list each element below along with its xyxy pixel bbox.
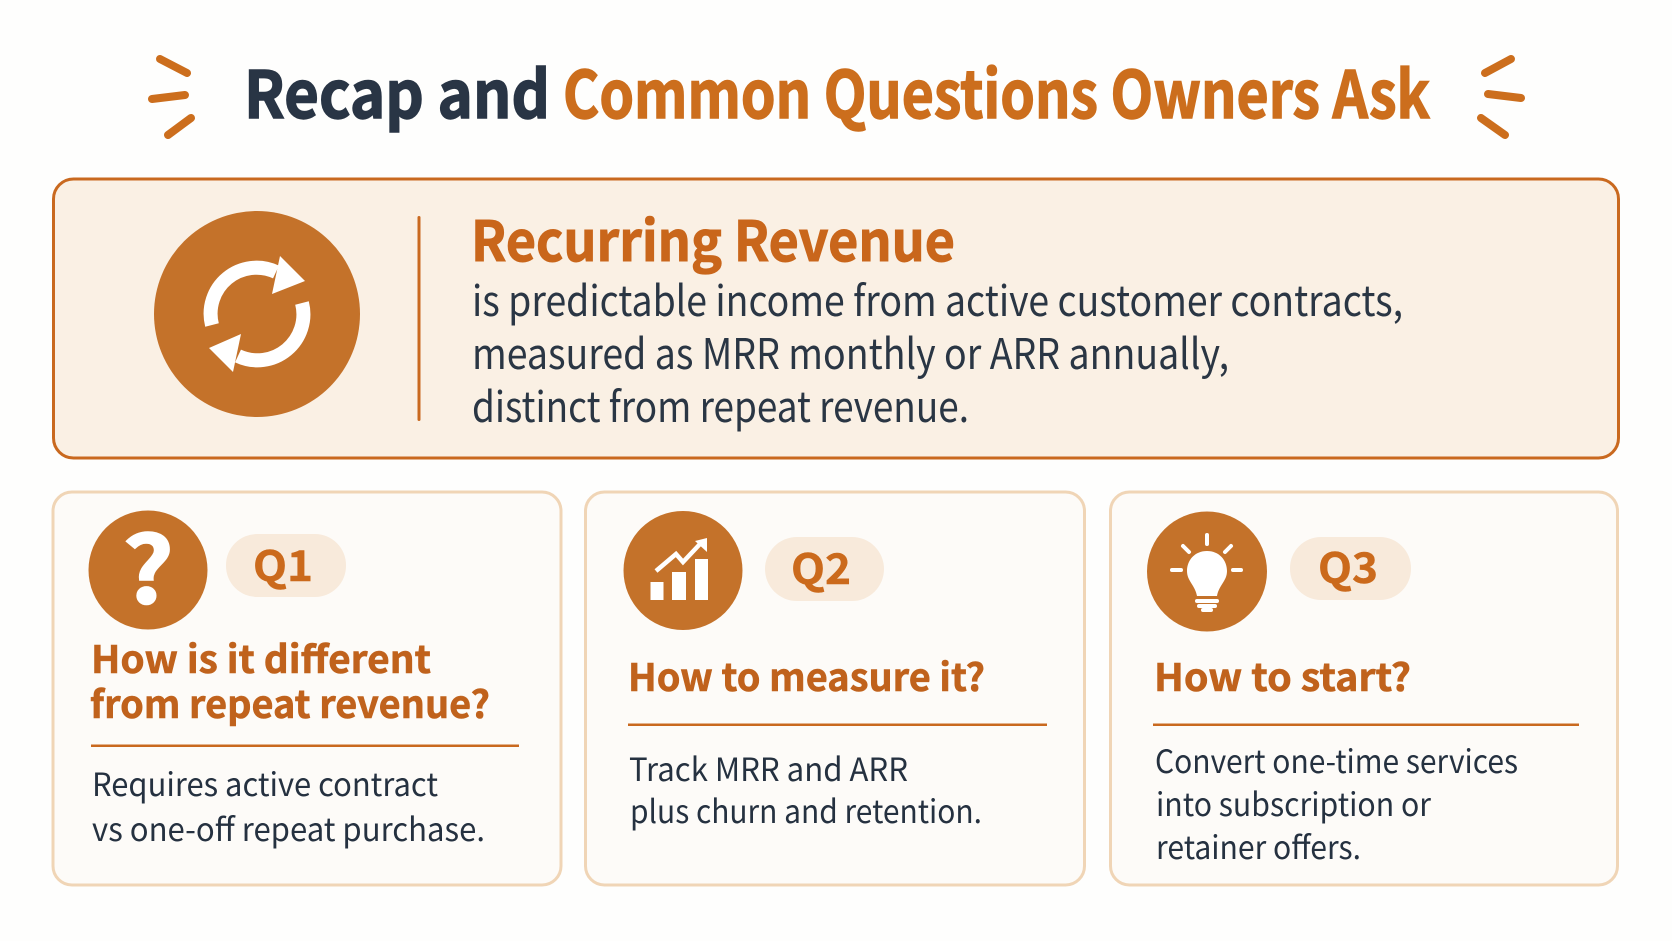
title: [244, 43, 1430, 137]
title: Common Questions Owners Ask: [563, 43, 1430, 137]
question heading: How to measure it?: [628, 647, 985, 702]
badge: Q1: Q1: [253, 533, 313, 594]
badge: Q2: [765, 536, 884, 601]
question heading: How is it different: [91, 629, 431, 684]
icon: refresh arrows: [154, 211, 360, 417]
panel: question 3: [1110, 492, 1618, 885]
answer text: retainer offers.: [1156, 823, 1361, 869]
icon: right title accent: [1481, 59, 1521, 135]
heading: recurring revenue: Recurring Revenue: [471, 197, 955, 277]
definition text: distinct from repeat revenue.: [472, 374, 969, 435]
answer text: into subscription or: [1156, 780, 1432, 826]
answer text: [629, 745, 982, 833]
answer text: Track MRR and ARR: [629, 745, 908, 791]
badge: Q2: Q2: [791, 536, 851, 597]
answer text: Convert one-time services: [1155, 737, 1518, 783]
panel: question 2: [586, 492, 1084, 885]
answer text: [1155, 737, 1518, 869]
title: Recap and: [244, 43, 550, 137]
answer text: Requires active contract: [92, 760, 438, 806]
icon: left title accent: [152, 59, 191, 135]
question heading: from repeat revenue?: [90, 674, 490, 729]
answer text: [92, 760, 485, 851]
panel: recurring revenue definition: [54, 179, 1618, 458]
answer text: plus churn and retention.: [630, 787, 982, 833]
definition text: measured as MRR monthly or ARR annually,: [472, 321, 1229, 382]
question heading: [90, 629, 490, 729]
answer text: vs one-off repeat purchase.: [92, 805, 485, 851]
icon: question mark: [88, 497, 208, 630]
badge: Q3: [1290, 535, 1411, 600]
icon: question mark: ?: [122, 497, 174, 630]
icon: light bulb: [1147, 512, 1267, 632]
badge: Q1: [226, 533, 346, 597]
question heading: How to start?: [1154, 647, 1411, 702]
badge: Q3: Q3: [1318, 535, 1378, 596]
icon: growth chart: [624, 511, 742, 630]
definition text: [472, 268, 1403, 435]
definition text: is predictable income from active customer contracts,: [472, 268, 1403, 329]
panel: question 1: [53, 492, 561, 885]
